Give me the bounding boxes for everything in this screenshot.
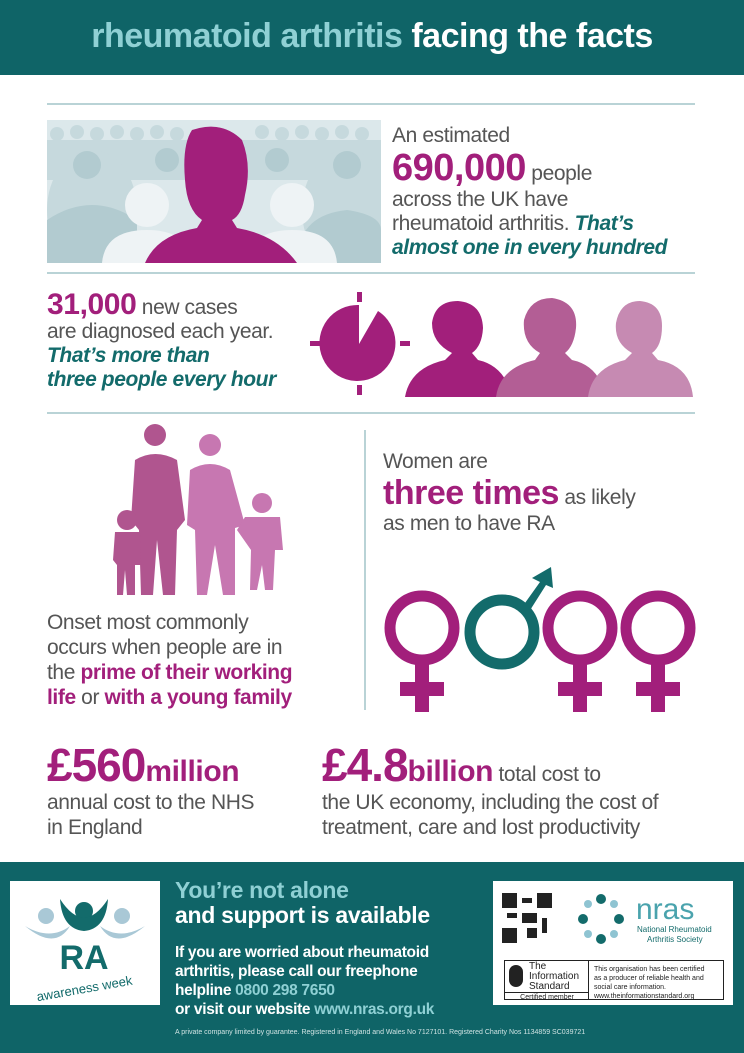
text: 560 million	[47, 739, 254, 839]
nras logo	[578, 893, 712, 944]
title: rheumatoid arthritis facing the facts	[91, 17, 653, 55]
text: onset	[47, 611, 292, 709]
helpline text: If you are worried about rheumatoid	[175, 944, 429, 961]
information standard	[504, 960, 724, 1000]
helpline text: helpline 0800 298 7650	[175, 982, 335, 999]
text: 690,000: rheumatoid arthritis. That’s	[392, 212, 634, 235]
header	[0, 0, 744, 75]
icon: gender symbols	[384, 567, 696, 712]
information standard: Certified member	[520, 994, 574, 1001]
information standard: www.theinformationstandard.org	[594, 993, 694, 1000]
text: onset: Onset most commonly	[47, 611, 248, 634]
text: 690,000: across the UK have	[392, 188, 568, 211]
information standard: social care information.	[594, 984, 666, 991]
text: 560 million: annual cost to the NHS	[47, 791, 254, 814]
text: women: as men to have RA	[383, 512, 555, 535]
text: 560 million: £560million	[47, 739, 239, 791]
helpline text: arthritis, please call our freephone	[175, 963, 417, 980]
text: 560 million: in England	[47, 816, 142, 839]
information standard: Standard	[529, 981, 570, 992]
nras logo: nras	[636, 893, 694, 926]
registration text: A private company limited by guarantee. Registered in England and Wales No 7127101. Registered Charity Nos 1134859 SC039721	[175, 1029, 585, 1036]
icon: family	[113, 424, 283, 595]
text: onset: occurs when people are in	[47, 636, 282, 659]
main person	[145, 127, 297, 263]
icon: clock	[310, 292, 410, 395]
support heading	[175, 877, 430, 928]
footer	[0, 862, 744, 1053]
text: 31,000: That’s more than	[47, 344, 209, 367]
logo: RA awareness week: RA	[59, 939, 109, 977]
text: onset: the prime of their working	[47, 661, 292, 684]
text: onset: life or with a young family	[47, 686, 292, 709]
crowd illustration	[47, 120, 381, 263]
support heading: and support is available	[175, 902, 430, 928]
text: 31,000	[47, 288, 278, 391]
helpline text: or visit our website www.nras.org.uk	[175, 1001, 434, 1018]
text: 4.8 billion: the UK economy, including the cost of	[322, 791, 658, 814]
logo: RA awareness week: awareness week	[35, 973, 134, 1004]
text: women: three times as likely	[383, 474, 635, 512]
text: 31,000: are diagnosed each year.	[47, 320, 273, 343]
information standard: as a producer of reliable health and	[594, 975, 704, 982]
nras logo: Arthritis Society	[647, 935, 703, 944]
text: women	[383, 450, 636, 535]
information standard: The	[529, 961, 546, 972]
helpline text	[175, 944, 434, 1018]
text: 690,000	[392, 124, 668, 259]
information standard: This organisation has been certified	[594, 966, 705, 973]
nras logo: National Rheumatoid	[637, 925, 712, 934]
support heading: You’re not alone	[175, 877, 349, 903]
text: 4.8 billion: £4.8billion total cost to	[322, 739, 601, 791]
text: 4.8 billion	[322, 739, 659, 839]
logo: RA awareness week	[10, 881, 160, 1005]
text: 690,000: 690,000 people	[392, 147, 592, 189]
information standard: Information	[529, 971, 579, 982]
text: 690,000: An estimated	[392, 124, 510, 147]
text: 31,000: 31,000 new cases	[47, 288, 237, 321]
text: 31,000: three people every hour	[47, 368, 276, 391]
text: 4.8 billion: treatment, care and lost productivity	[322, 816, 640, 839]
qr code	[502, 893, 552, 943]
text: women: Women are	[383, 450, 488, 473]
text: 690,000: almost one in every hundred	[392, 236, 667, 259]
logos panel	[493, 881, 733, 1005]
icon: three people	[405, 298, 693, 397]
